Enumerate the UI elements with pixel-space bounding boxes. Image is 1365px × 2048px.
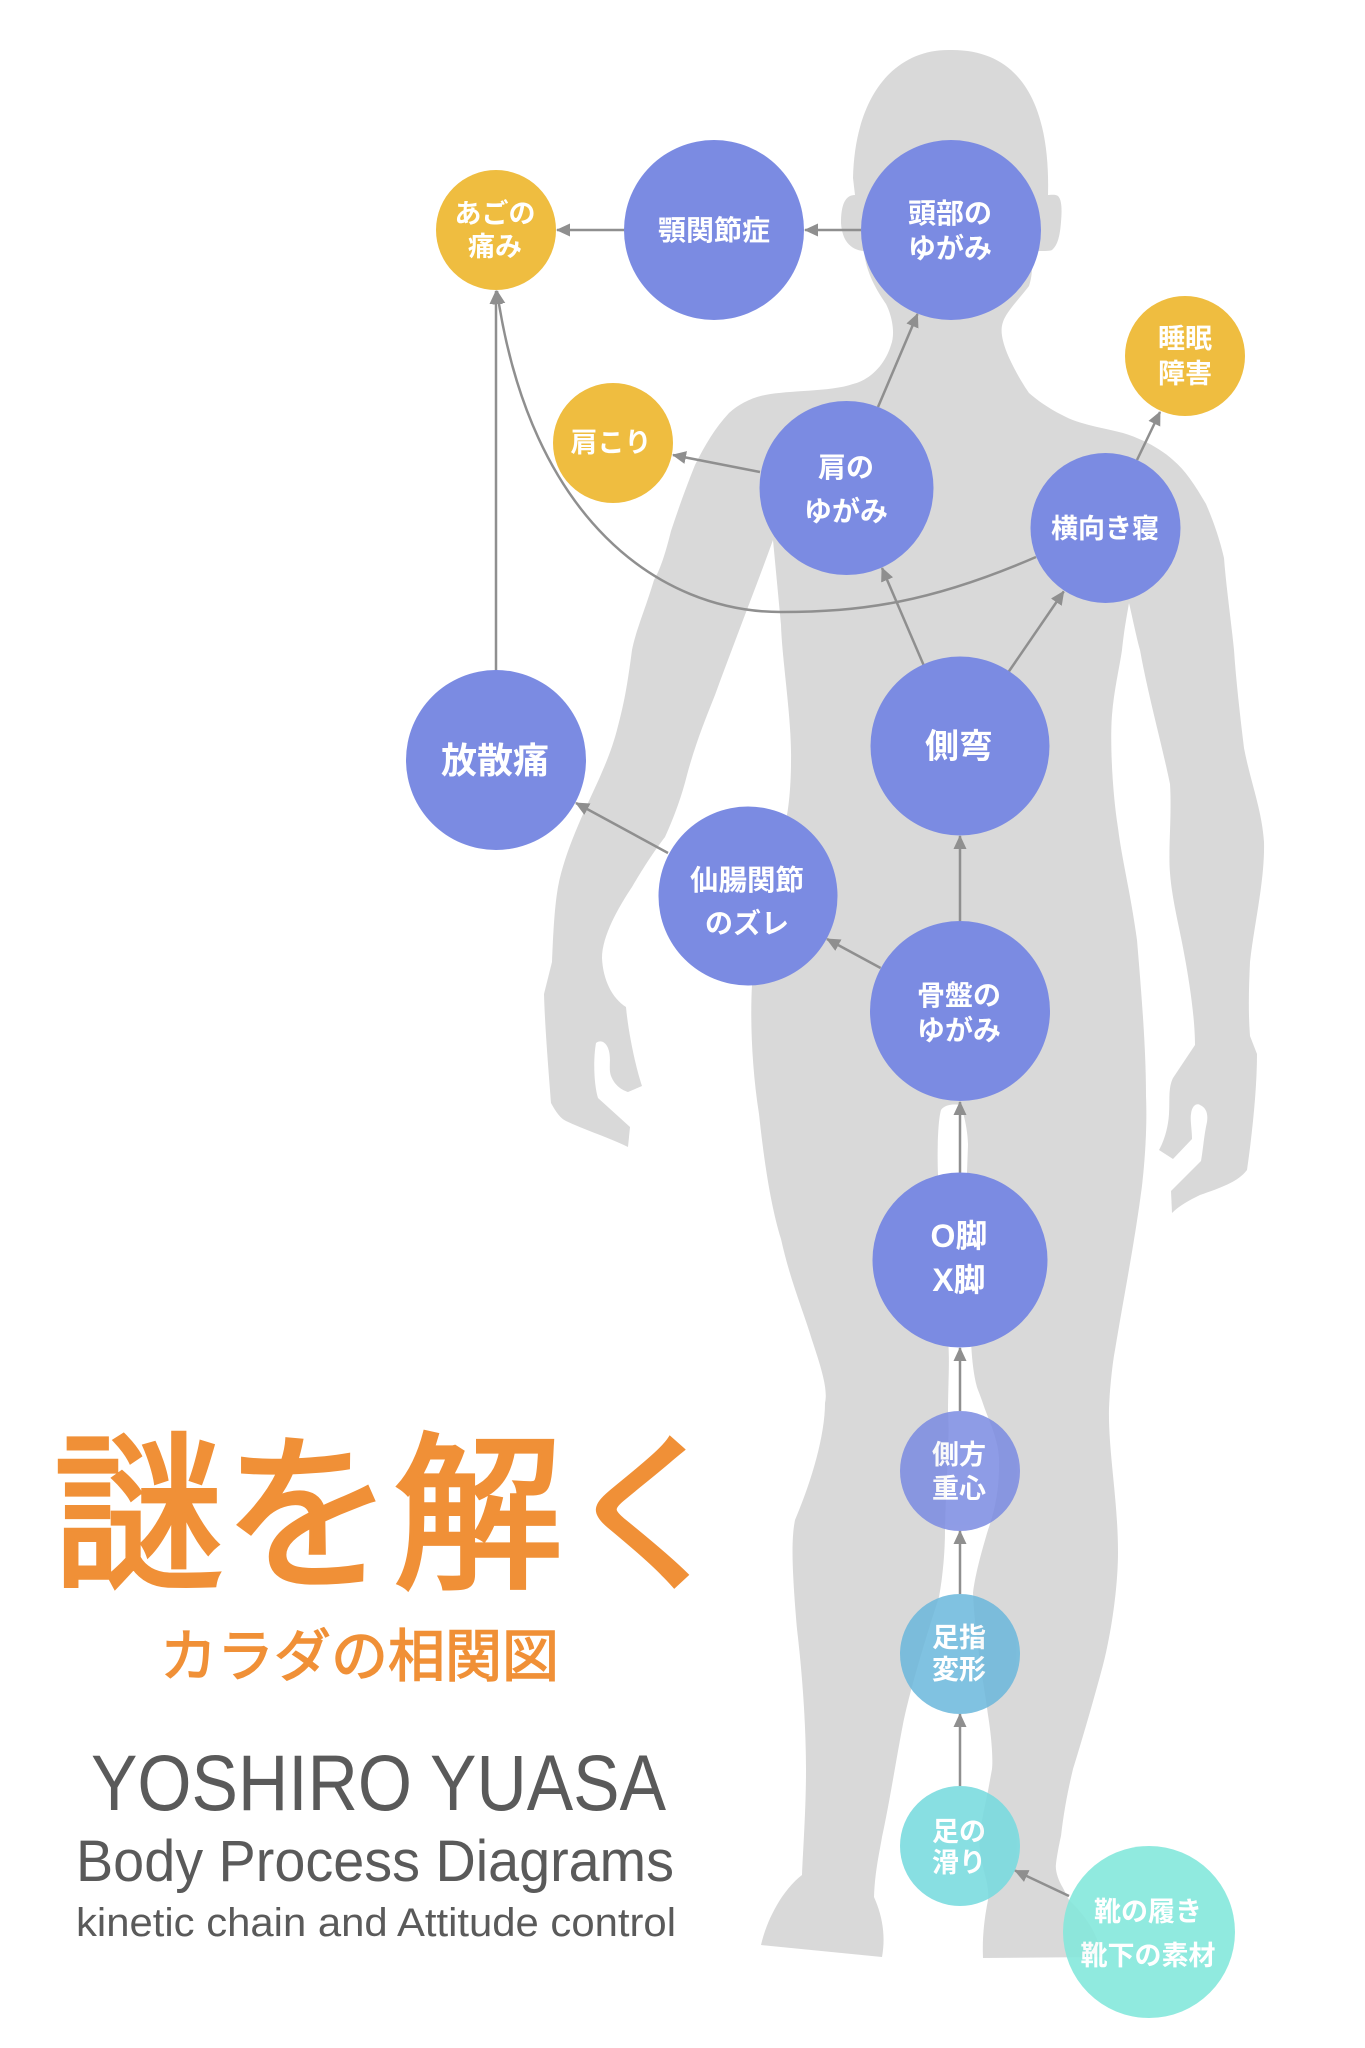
- arrow: side sleeping to sleep disorder: [1137, 412, 1160, 460]
- arrow: shoulder to head: [878, 314, 918, 407]
- node: bow legs and knock knees: O脚: [931, 1218, 987, 1254]
- node: toe deformity: [900, 1594, 1020, 1714]
- arrow: legs to pelvis: [959, 1102, 961, 1173]
- arrow: TMJ to jaw pain: [557, 229, 625, 231]
- arrow: sacroiliac to radiating pain: [576, 803, 668, 853]
- node: sacroiliac joint misalignment: [658, 806, 838, 986]
- node: toe deformity: 変形: [932, 1655, 986, 1685]
- node: side sleeping: 横向き寝: [1051, 514, 1159, 544]
- heading: body process diagrams: Body Process Diagrams: [76, 1829, 674, 1894]
- arrow: scoliosis to shoulder: [882, 568, 924, 665]
- node: head distortion: 頭部の: [908, 198, 992, 229]
- node: sacroiliac joint misalignment: のズレ: [705, 907, 789, 939]
- arrow: pelvis to scoliosis: [959, 836, 961, 921]
- arrow: shoes to foot slip: [1015, 1870, 1069, 1896]
- arrow: pelvis to sacroiliac: [827, 939, 881, 968]
- node: sleep disorder: 睡眠: [1158, 324, 1212, 354]
- arrow: lateral weight to legs: [959, 1348, 961, 1411]
- title: 謎を解く: [53, 1422, 733, 1612]
- node: radiating pain: 放散痛: [441, 740, 549, 781]
- node: shoulder distortion: 肩の: [818, 452, 874, 483]
- node: foot slippage: 滑り: [932, 1848, 986, 1878]
- node: shoulder distortion: [760, 401, 934, 575]
- node: TMJ disorder: [624, 140, 804, 320]
- node: sacroiliac joint misalignment: 仙腸関節: [690, 865, 804, 897]
- node: lateral center of gravity: 重心: [932, 1474, 986, 1504]
- node: scoliosis: 側弯: [925, 728, 993, 766]
- node: pelvis distortion: [870, 921, 1050, 1101]
- node: stiff shoulder: 肩こり: [570, 428, 652, 458]
- node: sleep disorder: [1125, 296, 1245, 416]
- node: scoliosis: [870, 656, 1050, 836]
- node: shoes and socks: [1063, 1846, 1235, 2018]
- node: pelvis distortion: 骨盤の: [917, 980, 1001, 1011]
- node: TMJ disorder: 顎関節症: [658, 215, 770, 246]
- node: jaw pain: [436, 170, 556, 290]
- node: head distortion: ゆがみ: [908, 232, 992, 264]
- node: bow legs and knock knees: [872, 1172, 1048, 1348]
- node: shoulder distortion: ゆがみ: [804, 495, 888, 527]
- node: lateral center of gravity: [900, 1411, 1020, 1531]
- human body silhouette: [544, 50, 1264, 1958]
- arrow: toes to lateral weight: [959, 1531, 961, 1594]
- node: foot slippage: 足の: [932, 1817, 986, 1847]
- node: side sleeping: [1030, 453, 1180, 603]
- node: shoes and socks: 靴の履き: [1094, 1897, 1202, 1927]
- node: lateral center of gravity: 側方: [932, 1440, 986, 1470]
- node: sleep disorder: 障害: [1158, 359, 1212, 389]
- node: stiff shoulder: [553, 383, 673, 503]
- node: head distortion: [861, 140, 1041, 320]
- subtitle: カラダの相関図: [160, 1625, 559, 1689]
- tagline: kinetic chain and Attitude control: [76, 1901, 676, 1945]
- node: shoes and socks: 靴下の素材: [1080, 1941, 1216, 1971]
- node: radiating pain: [406, 670, 586, 850]
- arrow: side sleeping curve to jaw pain: [497, 291, 1036, 612]
- node: toe deformity: 足指: [932, 1623, 986, 1653]
- arrow: radiating pain to jaw pain: [495, 291, 497, 671]
- arrow: shoulder to stiff shoulder: [673, 455, 760, 472]
- node: bow legs and knock knees: X脚: [932, 1262, 986, 1298]
- arrow: head to TMJ: [805, 229, 861, 231]
- node: jaw pain: 痛み: [468, 232, 522, 262]
- node: pelvis distortion: ゆがみ: [917, 1014, 1001, 1046]
- node: foot slippage: [900, 1786, 1020, 1906]
- arrow: scoliosis to side sleeping: [1008, 592, 1064, 672]
- arrow: foot slip to toes: [959, 1714, 961, 1786]
- node: jaw pain: あごの: [454, 198, 536, 229]
- author name: YOSHIRO YUASA: [91, 1738, 666, 1827]
